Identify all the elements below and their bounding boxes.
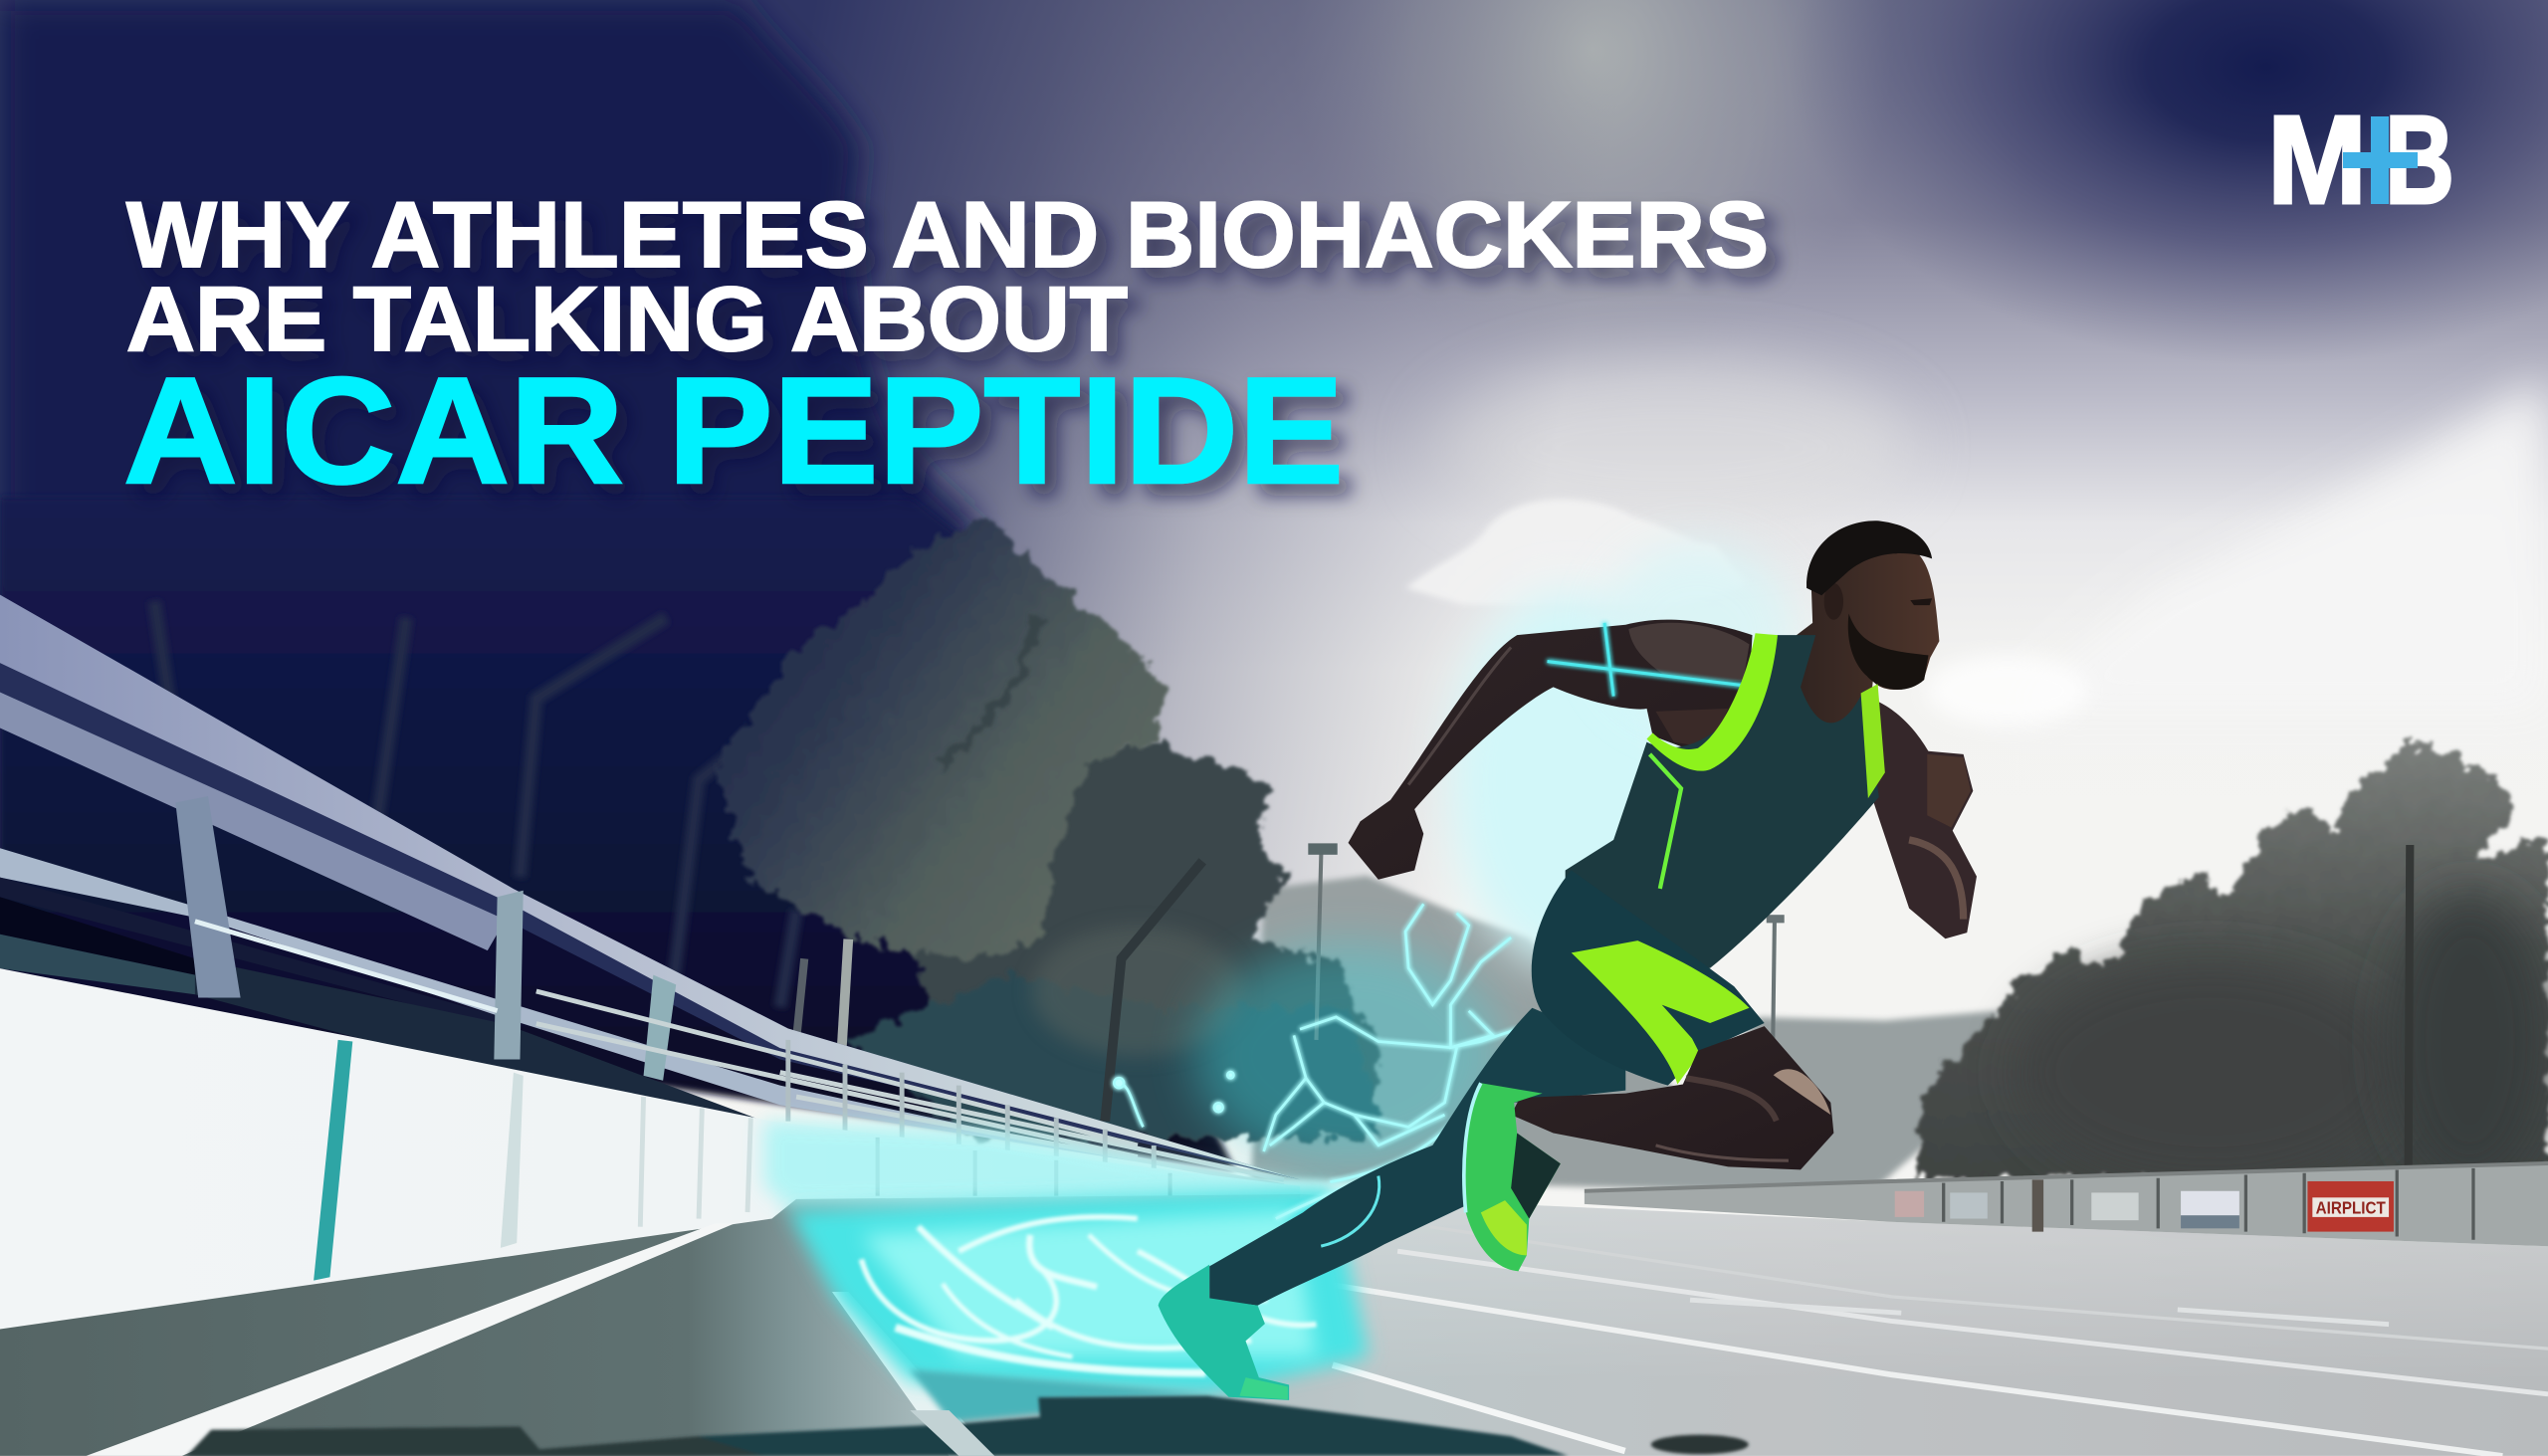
distant hills — [1251, 876, 2001, 1194]
arm neon lines — [1547, 623, 1746, 697]
clouds — [1405, 378, 2548, 727]
stadium railing — [0, 595, 1300, 1186]
title line 1: WHY ATHLETES AND BIOHACKERS — [126, 182, 1769, 287]
banner — [2307, 1181, 2394, 1232]
logo: M — [2267, 90, 2367, 230]
forward shoe — [1464, 1083, 1561, 1271]
lower left dark background — [0, 498, 1235, 1170]
neon seam — [1650, 754, 1681, 889]
right side trees — [1916, 741, 2548, 1186]
lime chest strap — [1646, 633, 1778, 771]
title line 2: ARE TALKING ABOUT — [126, 269, 1128, 370]
trailing shoe — [1159, 1265, 1289, 1400]
running track — [0, 1194, 2548, 1456]
lime shoulder strap — [1861, 684, 1885, 798]
main lit foliage — [715, 516, 1166, 958]
dark rear tree — [910, 741, 1381, 1138]
banner: AIRPLICT — [2316, 1198, 2386, 1218]
distant floodlights — [1308, 843, 1785, 1040]
right barrier wall with advertising boards — [1585, 1163, 2548, 1246]
shorts — [1532, 871, 1765, 1086]
hair — [1806, 520, 1932, 595]
teal lower trees — [845, 975, 1381, 1138]
energy swirls — [861, 1217, 1316, 1373]
forward thigh and calf — [1511, 1026, 1833, 1169]
teal ground reflection — [910, 1369, 1210, 1422]
white barrier wall — [0, 968, 1300, 1330]
eye — [1910, 598, 1932, 605]
ear — [1824, 583, 1843, 620]
title line 3: AICAR PEPTIDE — [123, 346, 1344, 516]
lightning and runner — [1114, 520, 1977, 1400]
lightning strokes — [1114, 904, 1517, 1219]
cyan energy wash — [763, 544, 1796, 1394]
shoulder highlight — [1628, 623, 1750, 681]
logo: B — [2385, 90, 2454, 230]
beard — [1848, 614, 1928, 690]
track shadow — [187, 1395, 1749, 1456]
dark tree silhouette top left — [0, 0, 975, 1007]
calf neon line — [1321, 1176, 1380, 1246]
rear arm — [1349, 620, 1753, 880]
front arm — [1870, 700, 1977, 938]
lime shorts panel — [1572, 940, 1750, 1084]
head and neck — [1789, 541, 1939, 734]
trailing leg — [1209, 1008, 1625, 1306]
tree limbs — [1105, 861, 1202, 1122]
knee highlight — [1774, 1069, 1830, 1115]
torso singlet — [1566, 635, 1879, 974]
lane line over shadow — [910, 1410, 994, 1456]
logo — [2267, 90, 2454, 230]
faint trunks — [154, 601, 821, 1007]
center trees — [154, 516, 1381, 1138]
title — [123, 182, 1769, 516]
